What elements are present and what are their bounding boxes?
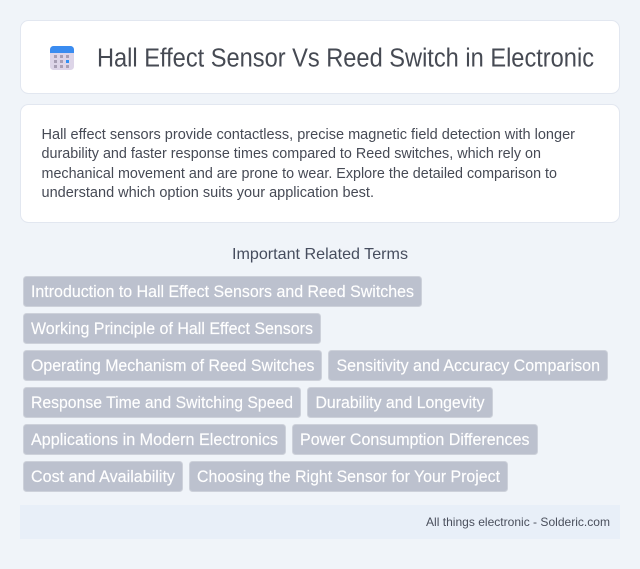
footer credit: All things electronic - Solderic.com bbox=[426, 515, 610, 529]
tag bbox=[308, 388, 492, 418]
text block: summary: understand which option suits your application best. bbox=[42, 185, 374, 201]
tag list: related terms bbox=[24, 276, 608, 492]
text block: summary bbox=[42, 127, 575, 201]
text block: summary: mechanical movement and are prone to wear. Explore the detailed comparison to bbox=[42, 166, 557, 182]
tag bbox=[24, 424, 286, 454]
tag bbox=[24, 314, 320, 344]
tag: Choosing the Right Sensor for Your Project bbox=[197, 468, 500, 486]
tag: Durability and Longevity bbox=[316, 394, 485, 412]
footer bar bbox=[20, 505, 620, 539]
tag bbox=[24, 276, 422, 306]
text block: summary: Hall effect sensors provide contactless, precise magnetic field detection with longer bbox=[42, 127, 575, 143]
tag: Cost and Availability bbox=[31, 468, 176, 486]
tag: Response Time and Switching Speed bbox=[31, 394, 293, 412]
tag: Operating Mechanism of Reed Switches bbox=[31, 357, 314, 375]
panel: header card bbox=[20, 20, 620, 94]
tag: Power Consumption Differences bbox=[300, 431, 530, 449]
title: Hall Effect Sensor Vs Reed Switch in Electronic bbox=[97, 44, 594, 72]
tag: Working Principle of Hall Effect Sensors bbox=[31, 320, 313, 338]
text block: summary: durability and faster response times compared to Reed switches, which rely on bbox=[42, 146, 541, 162]
tag: Applications in Modern Electronics bbox=[31, 431, 278, 449]
tag bbox=[190, 462, 508, 492]
heading: related terms: Important Related Terms bbox=[232, 246, 408, 263]
tag bbox=[24, 462, 182, 492]
icon: calendar bbox=[50, 46, 74, 70]
tag bbox=[24, 388, 300, 418]
tag bbox=[292, 424, 538, 454]
panel: summary card bbox=[20, 104, 620, 222]
tag bbox=[328, 350, 608, 380]
tag bbox=[24, 350, 322, 380]
tag: Sensitivity and Accuracy Comparison bbox=[336, 357, 600, 375]
tag: Introduction to Hall Effect Sensors and Reed Switches bbox=[31, 283, 414, 301]
